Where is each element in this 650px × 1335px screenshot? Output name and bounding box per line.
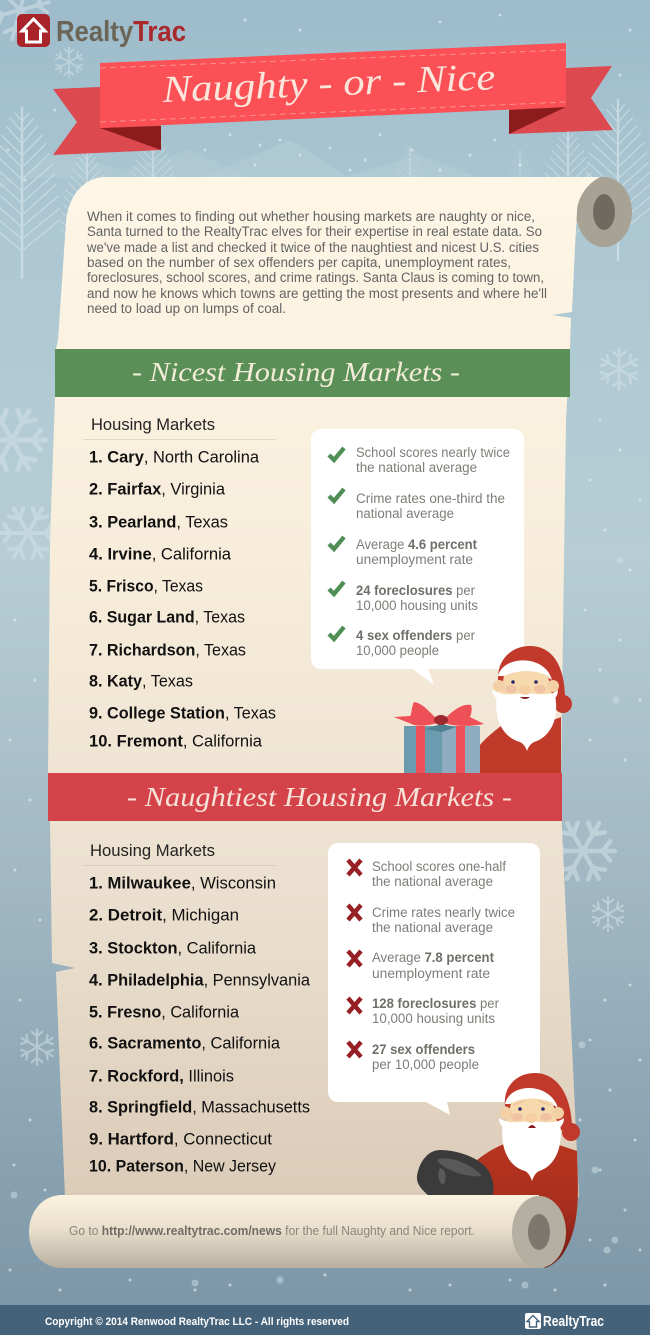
footer logo bbox=[525, 1313, 604, 1330]
intro text: we've made a list and checked it twice of the naughtiest and nicest U.S. cities bbox=[86, 240, 539, 255]
intro text: need to load up on lumps of coal. bbox=[87, 301, 286, 316]
footer bar bbox=[0, 1305, 650, 1335]
list: naughtiest housing markets: 10. Paterson, New Jersey bbox=[89, 1158, 277, 1176]
list: naughtiest housing markets: 3. Stockton, California bbox=[89, 940, 257, 958]
footer logo: RealtyTrac bbox=[543, 1313, 604, 1330]
heading band: nicest: - Nicest Housing Markets - bbox=[132, 357, 460, 387]
logo: RealtyTrac: RealtyTrac bbox=[56, 16, 186, 48]
list: nicest housing markets: 4. Irvine, California bbox=[89, 546, 232, 564]
parchment scroll bbox=[48, 177, 600, 1197]
callout: nicest stats: Average 4.6 percent bbox=[356, 537, 477, 552]
list: nicest housing markets: 7. Richardson, Texas bbox=[89, 642, 246, 660]
callout: naughtiest stats bbox=[328, 843, 540, 1115]
icon: lump of coal bbox=[417, 1150, 494, 1197]
list: nicest housing markets: 9. College Station, Texas bbox=[89, 704, 276, 722]
callout: nicest stats: 4 sex offenders per bbox=[356, 628, 475, 643]
top scroll roll end bbox=[576, 177, 632, 247]
list: naughtiest housing markets: 9. Hartford, Connecticut bbox=[89, 1130, 272, 1148]
title ribbon bbox=[53, 43, 613, 155]
callout: nicest stats: 10,000 housing units bbox=[356, 598, 478, 613]
list: naughtiest housing markets: 6. Sacramento, California bbox=[89, 1034, 281, 1052]
heading band: nicest bbox=[55, 349, 570, 397]
heading band: naughtiest bbox=[48, 773, 562, 821]
callout: naughtiest stats: School scores one-half bbox=[372, 859, 506, 874]
callout: naughtiest stats: unemployment rate bbox=[372, 966, 490, 981]
list: naughtiest housing markets: 5. Fresno, California bbox=[89, 1004, 240, 1022]
copyright: Copyright © 2014 Renwood RealtyTrac LLC - All rights reserved bbox=[45, 1316, 349, 1328]
callout: naughtiest stats: per 10,000 people bbox=[372, 1057, 479, 1072]
callout: nicest stats: 10,000 people bbox=[356, 643, 439, 658]
intro text bbox=[86, 209, 547, 316]
heading band: naughtiest: - Naughtiest Housing Markets - bbox=[127, 782, 512, 812]
list: naughtiest housing markets: 2. Detroit, Michigan bbox=[89, 906, 239, 924]
intro text: and now he knows which towns are getting the most presents and where he'll bbox=[87, 286, 547, 301]
list: naughtiest housing markets: 7. Rockford, Illinois bbox=[89, 1068, 234, 1086]
callout: naughtiest stats: the national average bbox=[372, 874, 493, 889]
list: nicest housing markets: 8. Katy, Texas bbox=[89, 672, 193, 690]
logo: RealtyTrac bbox=[17, 14, 186, 48]
icon: gift box bbox=[394, 702, 484, 773]
callout: naughtiest stats: Average 7.8 percent bbox=[372, 950, 494, 965]
list: naughtiest housing markets: Housing Markets bbox=[90, 842, 215, 860]
list: nicest housing markets: 10. Fremont, California bbox=[89, 732, 263, 750]
callout: nicest stats: Crime rates one-third the bbox=[356, 491, 505, 506]
callout: nicest stats: 24 foreclosures per bbox=[356, 583, 475, 598]
callout: naughtiest stats: 10,000 housing units bbox=[372, 1011, 495, 1026]
list: nicest housing markets: Housing Markets bbox=[91, 416, 215, 434]
list: nicest housing markets: 3. Pearland, Texas bbox=[89, 514, 228, 532]
callout: nicest stats: the national average bbox=[356, 460, 477, 475]
callout: nicest stats: unemployment rate bbox=[356, 552, 473, 567]
list: nicest housing markets: 5. Frisco, Texas bbox=[89, 578, 203, 596]
callout: naughtiest stats: the national average bbox=[372, 920, 493, 935]
callout: nicest stats: national average bbox=[356, 506, 454, 521]
bottom scroll roll bbox=[29, 1195, 566, 1268]
list: nicest housing markets: 1. Cary, North Carolina bbox=[89, 448, 260, 466]
list: naughtiest housing markets: 8. Springfield, Massachusetts bbox=[89, 1098, 310, 1116]
callout: naughtiest stats: 128 foreclosures per bbox=[372, 996, 499, 1011]
list: nicest housing markets: 2. Fairfax, Virginia bbox=[89, 480, 226, 498]
intro text: foreclosures, school scores, and crime ratings. Santa Claus is coming to town, bbox=[87, 270, 544, 285]
list: nicest housing markets: 6. Sugar Land, Texas bbox=[89, 608, 245, 626]
icon: happy santa bbox=[480, 646, 572, 773]
report link text: Go to http://www.realtytrac.com/news for the full Naughty and Nice report. bbox=[69, 1224, 475, 1238]
list: naughtiest housing markets: 4. Philadelphia, Pennsylvania bbox=[89, 972, 311, 990]
intro text: based on the number of sex offenders per capita, unemployment rates, bbox=[87, 255, 511, 270]
icon: sad santa bbox=[477, 1073, 580, 1268]
list: nicest housing markets bbox=[83, 416, 276, 750]
list: naughtiest housing markets bbox=[83, 842, 311, 1176]
intro text: When it comes to finding out whether housing markets are naughty or nice, bbox=[87, 209, 535, 224]
callout: naughtiest stats: Crime rates nearly twice bbox=[372, 905, 515, 920]
callout: nicest stats bbox=[311, 429, 524, 685]
callout: naughtiest stats: 27 sex offenders bbox=[372, 1042, 475, 1057]
title text: Naughty - or - Nice bbox=[161, 56, 496, 111]
list: naughtiest housing markets: 1. Milwaukee, Wisconsin bbox=[89, 874, 276, 892]
intro text: Santa turned to the RealtyTrac elves for their expertise in real estate data. So bbox=[87, 224, 542, 239]
callout: nicest stats: School scores nearly twice bbox=[356, 445, 510, 460]
